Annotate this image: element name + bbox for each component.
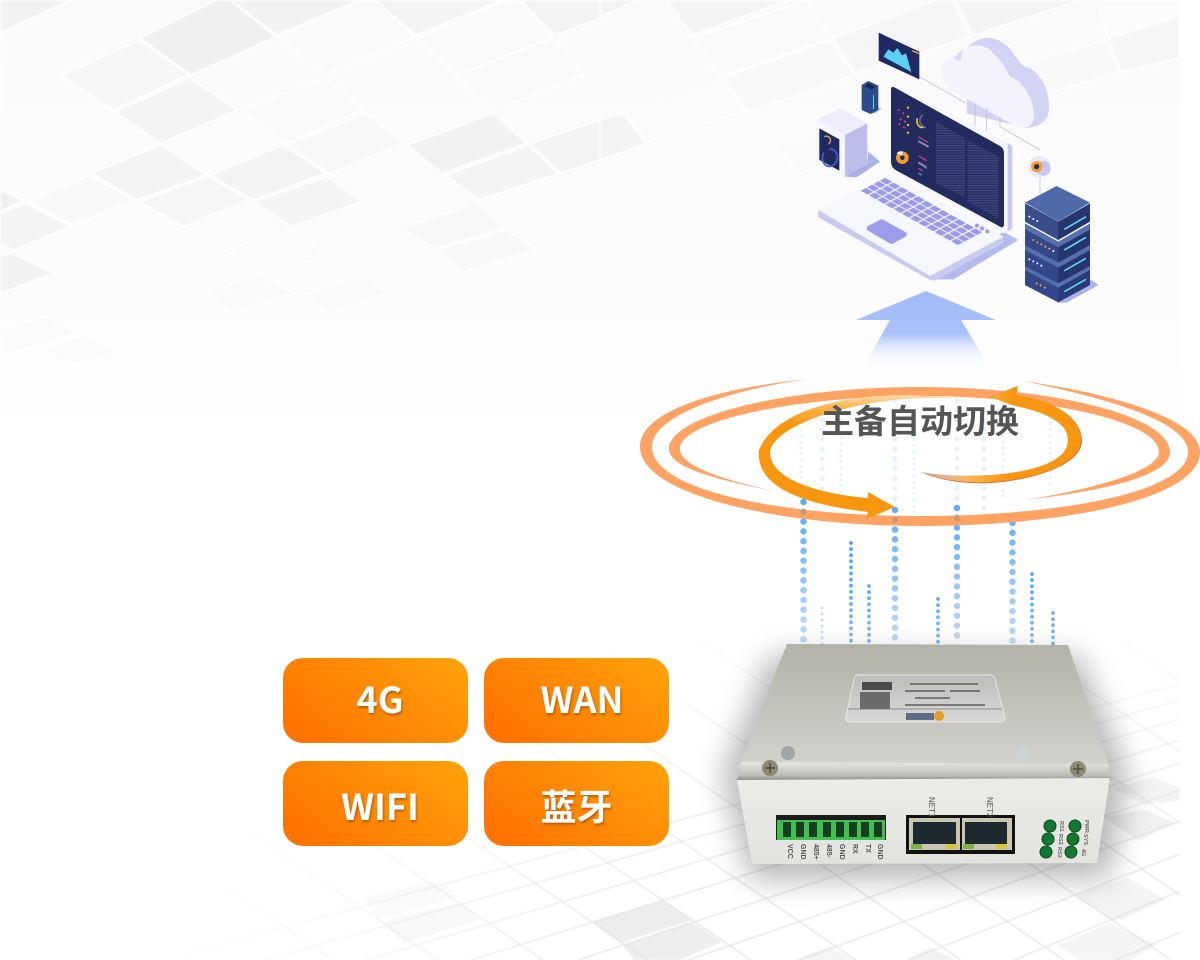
icon: chart window [879, 33, 919, 79]
screws [762, 760, 1086, 777]
icon: storage box [817, 108, 880, 177]
terminal labels: GND [799, 844, 806, 860]
device nameplate [846, 675, 1005, 722]
button: Bluetooth [484, 761, 669, 846]
button: WAN [484, 658, 669, 743]
device rail [737, 762, 1111, 780]
gateway device [737, 644, 1111, 864]
terminal labels: 485- [825, 844, 832, 859]
terminal block [776, 815, 886, 840]
button: WIFI [283, 761, 468, 846]
LED labels [1056, 820, 1089, 858]
icon: small device [862, 81, 882, 114]
terminal labels: 485+ [812, 844, 819, 860]
LED labels: RS1 [1058, 821, 1064, 832]
data stream dots [801, 390, 1053, 645]
icon: cloud [919, 38, 1049, 193]
ring label: 主备自动切换 [821, 403, 1019, 440]
terminal labels: TX [864, 844, 871, 853]
ethernet ports [906, 815, 1015, 854]
LED labels: RS2 [1057, 834, 1063, 845]
button: 4G [283, 658, 468, 743]
icon: laptop [818, 83, 1018, 281]
button: 4G: 4G [356, 672, 404, 724]
LED labels: RS3 [1056, 847, 1062, 858]
LED labels: 4G [1080, 849, 1086, 856]
switching rings [640, 379, 1200, 526]
device top plate [738, 644, 1110, 768]
button: WAN: WAN [540, 672, 623, 724]
button: WIFI: WIFI [341, 779, 419, 831]
terminal labels: GND [838, 844, 845, 860]
circular arrows [759, 386, 1082, 519]
port labels: NET2 [985, 797, 994, 818]
LED labels: SYS [1082, 834, 1088, 845]
icon: gear [1028, 156, 1051, 178]
port labels: NET1 [927, 797, 936, 818]
LED labels: PWR [1083, 820, 1089, 833]
device shadow [722, 655, 1128, 880]
icon: server rack [1025, 186, 1099, 303]
background: bottom floor tiles [312, 692, 1180, 960]
terminal labels: VCC [786, 844, 793, 859]
background: top perspective tiles [1, 0, 1178, 292]
button: Bluetooth: 蓝牙 [540, 779, 612, 831]
status LEDs [1040, 820, 1081, 858]
arrow: upward data flow [856, 291, 996, 368]
terminal labels [786, 844, 883, 860]
terminal labels: GND [876, 844, 883, 860]
illustration: laptop, cloud and server [817, 33, 1099, 303]
device front panel [737, 778, 1110, 864]
port labels [927, 797, 994, 818]
terminal labels: RX [851, 844, 858, 854]
